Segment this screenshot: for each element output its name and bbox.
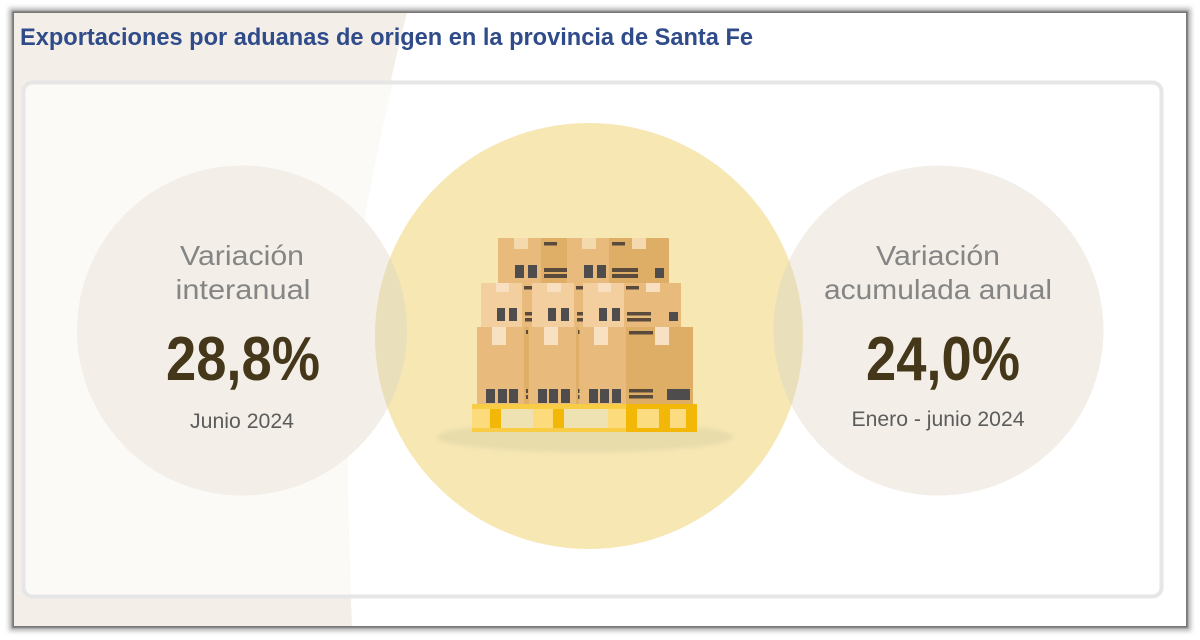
label: variación interanual: Variación xyxy=(180,240,304,271)
title: Exportaciones por aduanas de origen en la provincia de Santa Fe xyxy=(20,24,753,51)
beige background shape xyxy=(14,13,407,626)
value: 24,0% xyxy=(866,325,1020,394)
icon: boxes on pallet xyxy=(437,238,733,452)
right text block: acumulada anual xyxy=(824,274,1052,305)
left circle xyxy=(77,166,407,496)
right circle xyxy=(774,166,1104,496)
period: Junio 2024 xyxy=(190,410,294,433)
pallet xyxy=(472,404,697,432)
circle overlaps xyxy=(375,258,803,408)
middle row of boxes xyxy=(481,283,681,327)
left text block: interanual xyxy=(176,274,310,305)
bottom row of boxes xyxy=(477,327,693,405)
central yellow circle xyxy=(375,123,803,549)
label: variación acumulada anual: Variación xyxy=(876,240,1000,271)
top row of boxes xyxy=(498,238,669,283)
value: 28,8% xyxy=(166,325,320,394)
inner panel xyxy=(24,82,1162,596)
right text block xyxy=(824,240,1052,431)
left text block xyxy=(166,240,320,433)
period: Enero - junio 2024 xyxy=(852,408,1025,431)
pallet shadow xyxy=(437,422,733,452)
